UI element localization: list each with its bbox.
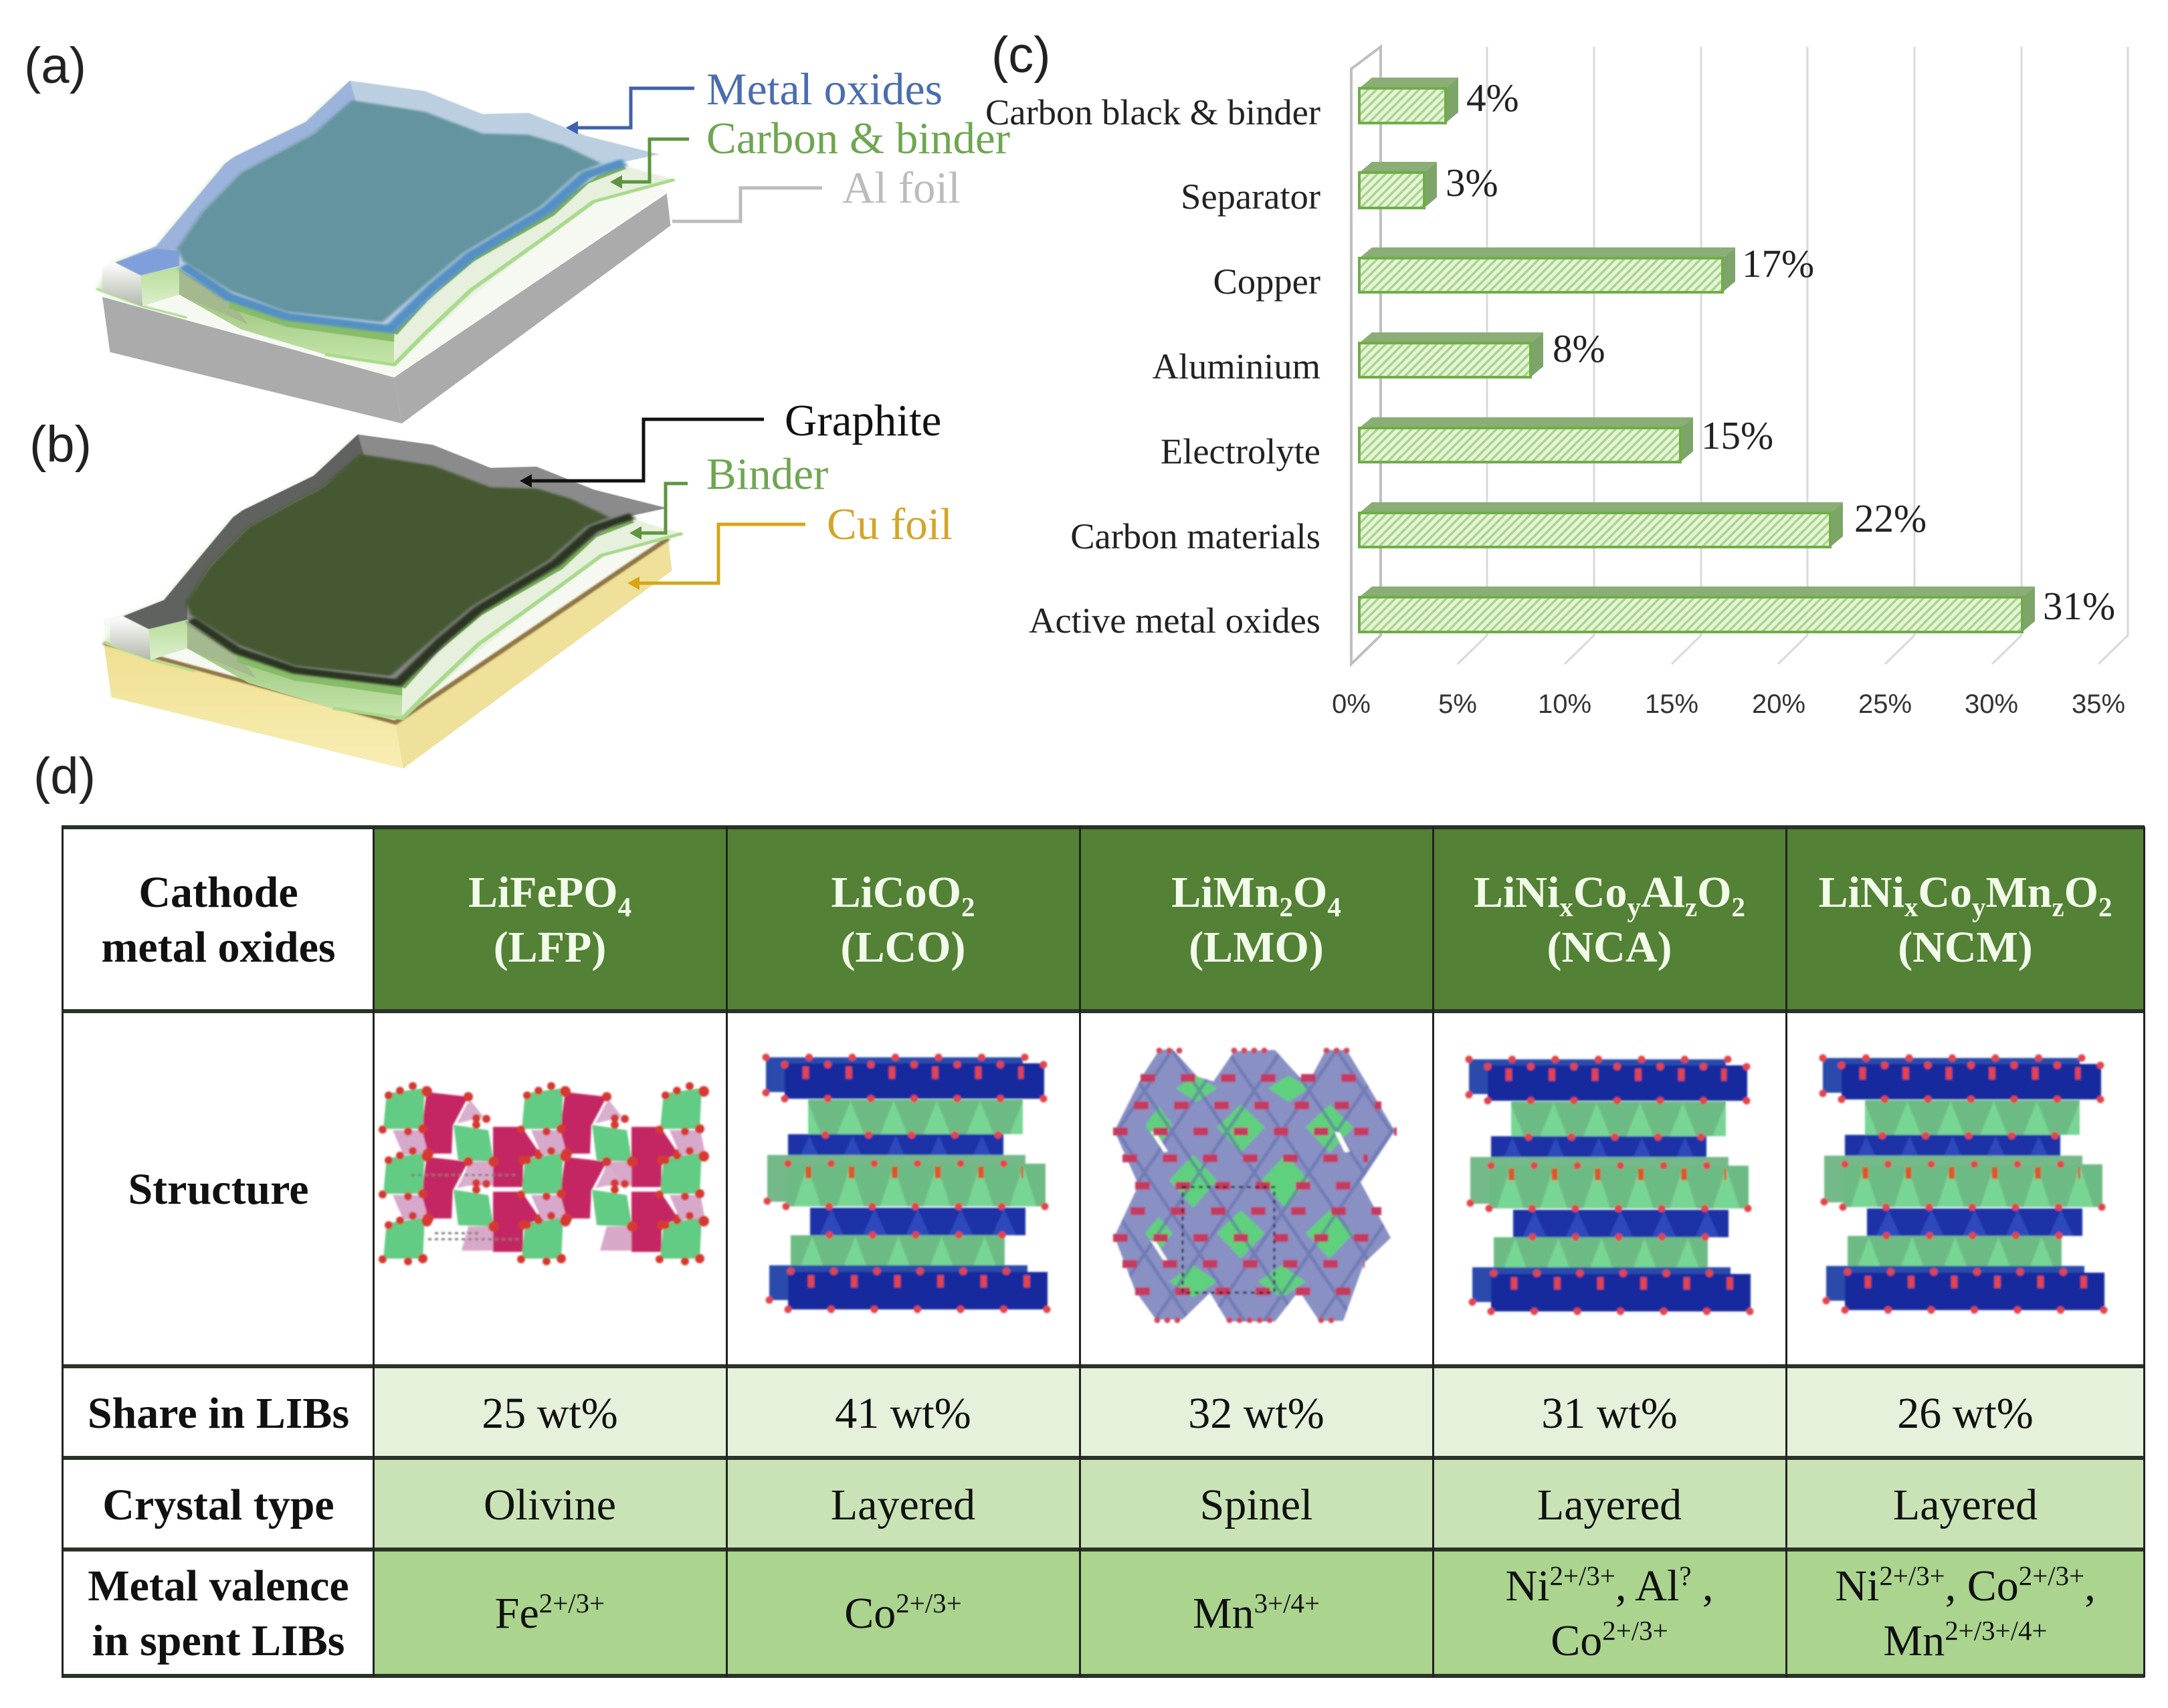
label: Metal oxides: Metal oxides bbox=[706, 64, 943, 114]
panel label a: (a) bbox=[24, 37, 86, 94]
row heading: structure: Structure bbox=[128, 1165, 309, 1214]
chart value labels: 4% bbox=[1466, 76, 1519, 120]
value: LMO share: 32 wt% bbox=[1188, 1388, 1324, 1438]
row heading: metal valence bbox=[64, 1550, 373, 1676]
value: LCO crystal bbox=[726, 1458, 1080, 1550]
value: NCM crystal bbox=[1786, 1458, 2145, 1550]
row heading: share: Share in LIBs bbox=[88, 1388, 349, 1438]
chart value labels: 3% bbox=[1446, 161, 1498, 205]
row heading: metal valence: in spent LIBs bbox=[92, 1616, 344, 1665]
chart value labels: 15% bbox=[1701, 413, 1773, 457]
chart x axis tick labels: 30% bbox=[1965, 689, 2018, 719]
chart x axis tick labels: 35% bbox=[2072, 689, 2125, 719]
structure: LCO layered bbox=[766, 1057, 1050, 1309]
value: LCO crystal: Layered bbox=[831, 1481, 975, 1529]
chart x axis tick labels: 10% bbox=[1538, 689, 1591, 719]
panel c: composition bar chart bbox=[985, 47, 2128, 719]
label: Binder: Binder bbox=[706, 449, 828, 499]
value: LCO share: 41 wt% bbox=[835, 1388, 971, 1438]
callout: binder arrow bbox=[629, 484, 688, 540]
value: LFP valence: Fe2+/3+ bbox=[495, 1588, 605, 1638]
chart category labels: Aluminium bbox=[1153, 346, 1320, 387]
column header: NCM: (NCM) bbox=[1898, 923, 2033, 971]
chart x axis tick labels bbox=[1332, 689, 2125, 719]
value: NCA valence: Ni2+/3+, Al? , bbox=[1506, 1561, 1713, 1610]
chart value labels: 31% bbox=[2043, 584, 2115, 628]
row heading: cathode metal oxides: metal oxides bbox=[101, 923, 336, 971]
value: NCM valence: Mn2+/3+/4+ bbox=[1884, 1616, 2047, 1665]
structure: LMO spinel bbox=[1113, 1049, 1397, 1321]
value: LMO valence bbox=[1080, 1550, 1433, 1676]
callout: carbon and binder arrow bbox=[610, 139, 689, 189]
value: LCO share bbox=[726, 1366, 1080, 1459]
chart value labels: 22% bbox=[1854, 496, 1927, 540]
chart value labels: 17% bbox=[1742, 241, 1814, 286]
label: Carbon & binder: Carbon & binder bbox=[706, 114, 1010, 163]
chart category labels: Active metal oxides bbox=[1029, 600, 1320, 641]
column header: LFP: (LFP) bbox=[494, 923, 606, 971]
column header: LMO: LiMn2O4 bbox=[1171, 868, 1341, 922]
chart x axis tick labels: 0% bbox=[1332, 689, 1371, 719]
value: LMO share bbox=[1080, 1366, 1433, 1459]
structure: NCM layered bbox=[1823, 1058, 2107, 1310]
label: Cu foil: Cu foil bbox=[827, 500, 953, 549]
column header: LMO bbox=[1080, 827, 1433, 1011]
row heading: metal valence: Metal valence bbox=[88, 1562, 349, 1610]
bar: active metal oxides 31% bbox=[1359, 586, 2035, 632]
value: NCA share bbox=[1433, 1366, 1786, 1459]
column header: NCM: LiNixCoyMnzO2 bbox=[1819, 868, 2112, 922]
callout: Al foil line bbox=[672, 188, 822, 221]
chart category labels: Electrolyte bbox=[1161, 431, 1320, 471]
column header: LCO: LiCoO2 bbox=[831, 868, 975, 922]
column header: NCA bbox=[1433, 827, 1786, 1011]
column header: NCA: LiNixCoyAlzO2 bbox=[1474, 868, 1745, 922]
value: NCA valence: Co2+/3+ bbox=[1551, 1616, 1668, 1665]
value: LMO crystal bbox=[1080, 1458, 1433, 1550]
value: NCM share: 26 wt% bbox=[1897, 1388, 2034, 1438]
value: LMO crystal: Spinel bbox=[1200, 1481, 1312, 1529]
column header: LFP bbox=[373, 827, 726, 1011]
panel label c: (c) bbox=[991, 27, 1051, 84]
value: NCA share: 31 wt% bbox=[1541, 1388, 1678, 1438]
value: LFP crystal bbox=[373, 1458, 726, 1550]
chart value labels: 8% bbox=[1553, 326, 1605, 370]
panel label d: (d) bbox=[33, 748, 96, 805]
column header: LMO: (LMO) bbox=[1189, 923, 1324, 971]
value: NCM share bbox=[1786, 1366, 2145, 1459]
value: NCA crystal bbox=[1433, 1458, 1786, 1550]
chart x axis tick labels: 25% bbox=[1858, 689, 1912, 719]
callout: metal oxides arrow bbox=[566, 88, 694, 134]
value: NCM valence bbox=[1786, 1550, 2145, 1676]
structure: NCA layered bbox=[1469, 1059, 1753, 1311]
chart category labels: Copper bbox=[1213, 261, 1320, 302]
chart x axis tick labels: 20% bbox=[1752, 689, 1805, 719]
chart category labels: Separator bbox=[1181, 176, 1320, 217]
value: NCA crystal: Layered bbox=[1537, 1481, 1682, 1529]
value: LMO valence: Mn3+/4+ bbox=[1193, 1588, 1320, 1638]
row heading: crystal type: Crystal type bbox=[102, 1481, 334, 1529]
callout: graphite arrow bbox=[520, 419, 764, 488]
label: Al foil: Al foil bbox=[842, 163, 961, 213]
chart x axis tick labels: 15% bbox=[1645, 689, 1698, 719]
row heading: cathode metal oxides: Cathode bbox=[138, 868, 298, 916]
column header: LFP: LiFePO4 bbox=[468, 868, 631, 922]
row heading: cathode metal oxides bbox=[64, 827, 373, 1011]
column header: NCA: (NCA) bbox=[1547, 923, 1672, 971]
column header: NCM bbox=[1786, 827, 2145, 1011]
table row: crystal type bbox=[102, 1460, 2143, 1547]
bar: copper 17% bbox=[1359, 247, 1735, 292]
value: LFP valence bbox=[373, 1550, 726, 1676]
value: LCO valence: Co2+/3+ bbox=[844, 1588, 962, 1638]
bar: carbon black & binder 4% bbox=[1359, 78, 1458, 123]
bar: carbon materials 22% bbox=[1359, 502, 1843, 547]
structure: LFP olivine bbox=[379, 1082, 709, 1265]
value: LFP share bbox=[373, 1366, 726, 1459]
callout: Cu foil arrow bbox=[627, 524, 805, 590]
chart value labels bbox=[1446, 76, 2115, 628]
value: LFP share: 25 wt% bbox=[482, 1388, 618, 1438]
column header: LCO: (LCO) bbox=[840, 923, 965, 971]
column header: LCO bbox=[726, 827, 1080, 1011]
bar: separator 3% bbox=[1359, 162, 1437, 208]
row heading: crystal type bbox=[64, 1458, 373, 1550]
chart x axis tick labels: 5% bbox=[1438, 689, 1477, 719]
chart gridlines and axes bbox=[1351, 47, 2128, 664]
panel label b: (b) bbox=[29, 416, 92, 473]
table row: metal valence bbox=[88, 1552, 2143, 1674]
value: NCA valence bbox=[1433, 1550, 1786, 1676]
row heading: share bbox=[64, 1366, 373, 1459]
value: NCM crystal: Layered bbox=[1893, 1481, 2038, 1529]
chart category labels bbox=[985, 92, 1320, 641]
value: NCM valence: Ni2+/3+, Co2+/3+, bbox=[1835, 1561, 2096, 1610]
table row: share in LIBs bbox=[88, 1368, 2143, 1456]
panel b: anode layer diagram bbox=[104, 435, 682, 768]
value: LCO valence bbox=[726, 1550, 1080, 1676]
chart category labels: Carbon black & binder bbox=[985, 92, 1320, 132]
bar: electrolyte 15% bbox=[1359, 417, 1693, 462]
chart category labels: Carbon materials bbox=[1070, 516, 1320, 556]
panel a: cathode layer diagram bbox=[96, 81, 674, 423]
table row: header bbox=[101, 829, 2143, 1009]
label: Graphite: Graphite bbox=[785, 396, 941, 445]
value: LFP crystal: Olivine bbox=[484, 1481, 616, 1529]
bar: aluminium 8% bbox=[1359, 332, 1543, 377]
